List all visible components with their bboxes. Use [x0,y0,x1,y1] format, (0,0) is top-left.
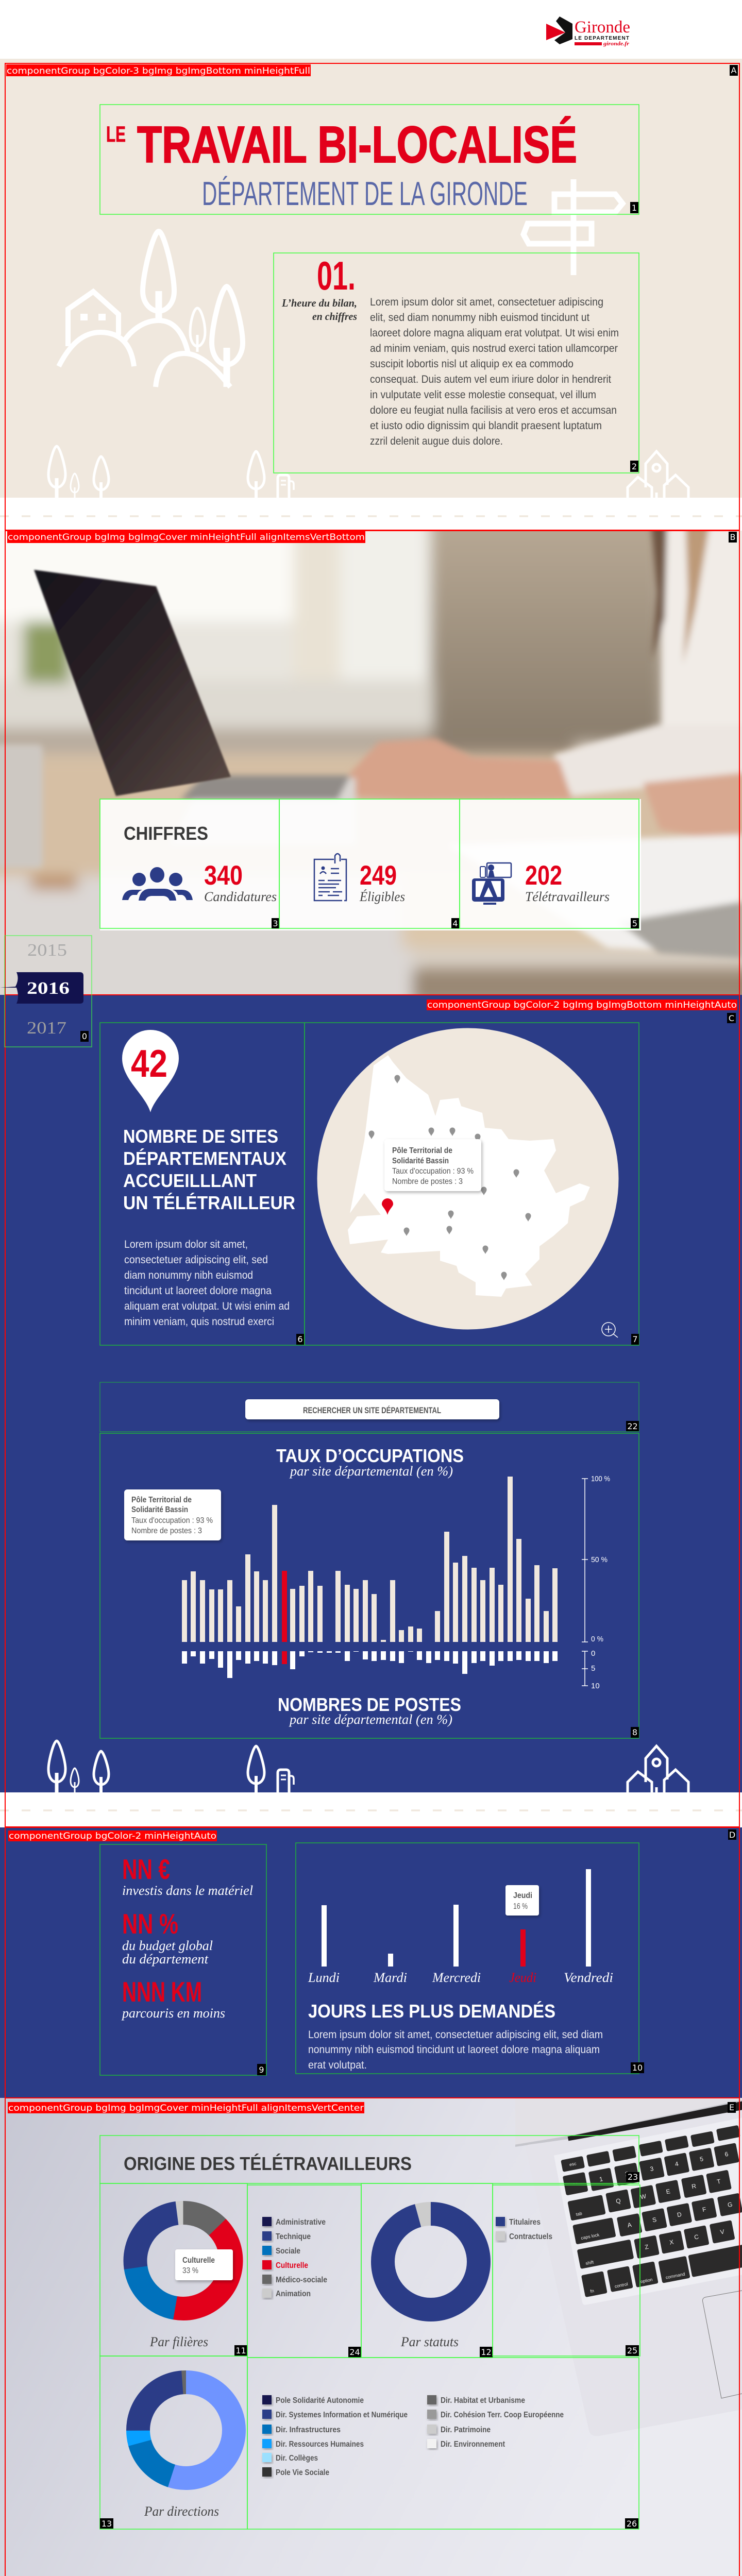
panel: donut filieres: 11 [235,2346,246,2355]
donut chart: filieres [115,2193,251,2329]
legend: directions: Dir. Systemes Information et Numérique [276,2411,408,2419]
panel: occupation chart: 8 [632,1727,637,1737]
panel: occupation chart: par site départemental (en %) [289,1464,453,1479]
legend: filieres: Sociale [276,2247,300,2256]
tooltip [384,1139,481,1191]
panel: CHIFFRES candidatures: Candidatures [204,889,277,904]
photo: laptop from above: C [694,2233,700,2241]
panel: eligibles: 4 [452,919,458,928]
bar chart: days: Lundi [308,1970,340,1985]
icon: people [122,867,193,901]
paragraph: in vulputate velit esse molestie consequat, vel illum [370,389,596,401]
tooltip: Nombre de postes : 3 [131,1527,202,1535]
section tag B: componentGroup bgImg bgImgCover minHeightFull alignItemsVertBottom [8,532,365,543]
panel: donut directions: 13 [102,2519,112,2529]
illustration: village [59,231,243,387]
section tag D: componentGroup bgColor-2 minHeightAuto [9,1831,216,1841]
tooltip: Pôle Territorial de [392,1146,452,1155]
heading: NOMBRE DE SITES [123,1126,278,1147]
panel: donut statuts: 12 [481,2347,492,2357]
legend: directions: Dir. Ressources Humaines [276,2440,364,2449]
paragraph: Lorem ipsum dolor sit amet, consectetuer adipiscing [370,296,603,308]
bar chart: days: Jeudi [509,1970,536,1985]
tooltip [124,1489,221,1540]
tooltip: Solidarité Bassin [131,1505,188,1514]
axis: occupation and posts [582,1475,610,1690]
photo: laptop from above: 6 [724,2150,729,2158]
paragraph: ad minim veniam, quis nostrud exerci tation ullamcorper [370,343,618,354]
photo: laptop from above: S [652,2216,657,2224]
section tag C: componentGroup bgColor-2 bgImg bgImgBottom minHeightAuto [427,1000,737,1010]
photo: laptop from above: ~ [573,2179,578,2188]
icon: map pin with 42 [122,1030,179,1112]
legend: statuts: Titulaires [509,2218,541,2227]
timeline navigation: 2016 [27,979,70,998]
timeline navigation: 0 [82,1031,87,1041]
section tag B: B [730,532,735,542]
photo: laptop from above: tab [576,2211,583,2217]
tooltip: Pôle Territorial de [131,1496,192,1504]
bar chart: posts [182,1651,558,1678]
heading: chiffres: CHIFFRES [124,823,208,844]
logo: Gironde: Gironde [575,18,630,37]
bar chart: days: Vendredi [564,1970,613,1985]
photo: laptop from above: Q [615,2197,621,2205]
intro panel 01 [274,253,639,473]
section B: photo with key figures [0,515,742,1010]
section D: budget and days [0,1827,742,2098]
side heading: L’heure du bilan, [281,297,357,309]
photo: laptop from above: 5 [699,2155,704,2163]
legend: directions: Pole Solidarité Autonomie [276,2396,364,2405]
timeline navigation [0,936,92,1047]
section C: sites map and occupation chart [0,995,742,1827]
legend: directions: Dir. Infrastructures [276,2426,341,2434]
legend: filieres: Animation [276,2290,311,2298]
map circle [317,1028,618,1329]
panel: days: 10 [632,2063,643,2073]
tooltip: Jeudi [505,1885,539,1916]
search button panel: 22 [627,1421,638,1431]
heading: JOURS LES PLUS DEMANDÉS [308,2001,555,2022]
tooltip: Taux d'occupation : 93 % [131,1516,213,1525]
timeline navigation: 2015 [27,941,67,960]
photo: laptop from above: V [719,2228,725,2236]
heading panel: ORIGINE DES TÉLÉTRAVAILLEURS [124,2153,412,2174]
photo: laptop from above: F [702,2206,707,2213]
legend: statuts: Contractuels [509,2232,552,2241]
title panel: 1 [632,203,637,213]
paragraph: zzril delenit augue duis dolore. [370,435,503,447]
photo: laptop from above: G [727,2201,733,2209]
paragraph: consequat. Duis autem vel eum iriure dolor in hendrerit [370,374,611,385]
heading: ACCUEILLLANT [123,1170,257,1191]
panel: days [296,1843,644,2074]
panel: donut statuts [361,2183,493,2358]
intro panel 01: 2 [632,462,637,471]
panel: map: 7 [632,1334,638,1344]
photo: laptop from above: command [665,2272,685,2280]
legend: directions: 26 [627,2519,637,2529]
tooltip: culturelle: 33 % [182,2266,198,2275]
axis: occupation and posts: 5 [591,1664,595,1673]
photo: laptop from above: fn [590,2288,595,2294]
section tag C: C [729,1013,734,1023]
panel: budget figures: 9 [259,2065,264,2075]
logo: Gironde [546,16,630,47]
legend: directions: Dir. Habitat et Urbanisme [441,2396,525,2405]
axis: occupation and posts: 50 % [591,1555,608,1564]
panel: budget figures: du budget global [122,1938,213,1953]
heading: DÉPARTEMENTAUX [123,1148,286,1169]
section tag A: A [731,65,737,75]
paragraph: Lorem ipsum dolor sit amet, consectetuer adipiscing elit, sed diam [308,2029,603,2041]
panel: CHIFFRES candidatures [100,799,279,928]
photo: laptop from above: D [677,2211,682,2218]
title panel: TRAVAIL BI-LOCALISÉ [137,116,577,174]
heading: UN TÉLÉTRAILLEUR [123,1192,295,1213]
figure: 340: 340 [204,860,243,891]
photo: laptop from above: X [669,2238,674,2246]
photo: laptop from above: esc [569,2161,577,2167]
axis: occupation and posts: 0 % [591,1635,603,1643]
subtitle: DÉPARTEMENT DE LA GIRONDE [202,175,528,212]
icon: document [314,854,346,901]
figure: 202: 202 [525,860,562,891]
panel: donut directions: Par directions [144,2504,219,2519]
panel: donut statuts: Par statuts [400,2334,459,2349]
paragraph: elit, sed diam nonummy nibh euismod tincidunt ut [370,312,589,324]
photo: laptop from above: W [639,2193,647,2201]
section tag E: componentGroup bgImg bgImgCover minHeightFull alignItemsVertCenter [8,2103,364,2113]
panel: occupation chart [100,1433,639,1738]
tooltip: Nombre de postes : 3 [392,1177,463,1186]
illustration: skyline [48,446,688,498]
section tag A [6,64,738,76]
paragraph: Lorem ipsum dolor sit amet, [124,1239,248,1250]
axis: occupation and posts: 0 [591,1649,595,1658]
photo: laptop from above: R [691,2182,697,2190]
section tag D: D [729,1830,735,1840]
tooltip: culturelle: Culturelle [182,2256,215,2265]
section tag A: componentGroup bgColor-3 bgImg bgImgBottom minHeightFull [7,66,310,76]
paragraph: nonummy nibh euismod tincidunt ut laoreet dolore magna aliquam [308,2044,600,2056]
logo: Gironde: gironde.fr [603,41,630,47]
icon: map pin with 42: 42 [131,1042,167,1085]
legend: filieres: Culturelle [276,2261,308,2270]
bar chart: days: Mardi [373,1970,407,1985]
legend: directions: Dir. Collèges [276,2454,318,2463]
search button panel: RECHERCHER UN SITE DÉPARTEMENTAL [303,1405,441,1415]
heading panel [100,2136,639,2183]
legend: directions: Pole Vie Sociale [276,2468,329,2477]
panel: donut directions [100,2356,247,2529]
paragraph: laoreet dolore magna aliquam erat volutpat. Ut wisi enim [370,327,619,339]
number 01: 01. [317,253,356,298]
section tag B [7,531,737,543]
selected pin [382,1198,393,1215]
paragraph: suscipit lobortis nisl ut aliquip ex ea commodo [370,358,574,370]
legend: directions: Dir. Patrimoine [441,2426,491,2434]
chart title: TAUX D’OCCUPATIONS [276,1445,464,1466]
title: LE [106,122,126,147]
panel: teletravailleurs [460,799,639,928]
title panel [100,105,639,214]
section tag D [8,1829,736,1841]
panel: eligibles: Éligibles [359,889,405,904]
icon: devices [472,863,511,905]
figure: NNN KM: NNN KM [122,1976,202,2008]
illustration: signpost [524,179,622,275]
panel: occupation chart: par site départemental (en %) [289,1712,452,1727]
section tag E: E [729,2103,734,2112]
paragraph: tincidunt ut laoreet dolore magna [124,1285,272,1297]
page header with logo [0,0,742,59]
photo: woman at laptop [0,515,742,1010]
paragraph [308,2029,603,2071]
tooltip: Taux d'occupation : 93 % [392,1167,474,1176]
paragraph [370,296,619,447]
bar chart: occupation [182,1477,558,1642]
photo: laptop from above: E [665,2188,671,2195]
photo: laptop from above: 1 [599,2175,603,2183]
paragraph: consectetuer adipiscing elit, sed [124,1254,268,1266]
bar chart: days [308,1869,613,1985]
photo: laptop from above: 3 [649,2165,654,2173]
figure: NN euro: NN € [122,1853,170,1885]
paragraph: diam nonummy nibh euismod [124,1269,253,1281]
photo: laptop from above: A [627,2221,632,2229]
photo: laptop from above: 4 [674,2160,679,2168]
legend: directions: Dir. Environnement [441,2440,505,2449]
photo: laptop from above: 2 [625,2170,629,2178]
legend: filieres: Médico-sociale [276,2276,327,2284]
donut chart: directions [126,2370,246,2490]
panel: budget figures: investis dans le matériel [122,1883,253,1898]
legend: filieres: Technique [276,2232,311,2241]
paragraph: dolore eu feugiat nulla facilisis at vero eros et accumsan [370,404,617,416]
paragraph [124,1239,290,1328]
photo: laptop from above: Z [644,2243,649,2251]
photo: laptop from above: T [716,2178,722,2185]
illustration: skyline blue [48,1741,688,1792]
intro panel 01: en chiffres [312,310,357,323]
legend: directions: Dir. Cohésion Terr. Coop Européenne [441,2411,564,2419]
paragraph: erat volutpat. [308,2059,367,2071]
panel: teletravailleurs: Télétravailleurs [525,889,610,904]
tooltip: Solidarité Bassin [392,1157,449,1165]
panel: sites count [100,1023,305,1345]
panel: teletravailleurs: 5 [632,919,637,928]
legend: filieres [247,2185,361,2358]
section A: title and intro [0,59,742,531]
paragraph: et iusto odio dignissim qui blandit praesent luptatum [370,420,602,432]
legend: directions [247,2358,639,2529]
photo: laptop from above: shift [585,2259,595,2266]
photo: laptop from above [0,2098,742,2576]
paragraph: aliquam erat volutpat. Ut wisi enim ad [124,1300,290,1312]
photo: laptop from above: control [614,2281,628,2289]
legend: filieres: 24 [349,2347,360,2357]
heading panel: 23 [628,2172,638,2182]
panel: eligibles [279,799,460,928]
section E: origin donuts [0,2098,742,2576]
timeline navigation: 2017 [27,1019,66,1038]
chart subtitle: NOMBRES DE POSTES [278,1694,461,1715]
figure: NN percent: NN % [122,1908,178,1940]
tooltip: Jeudi: Jeudi [513,1891,532,1900]
axis: occupation and posts: 100 % [591,1475,610,1483]
donut chart: statuts [372,2203,490,2320]
heading [123,1126,295,1213]
panel: budget figures: parcouris en moins [121,2006,225,2021]
panel: CHIFFRES candidatures: 3 [273,919,278,928]
legend: statuts: 25 [627,2346,637,2355]
panel: budget figures [100,1844,266,2075]
panel: donut filieres [100,2183,251,2356]
bar chart: days: Mercredi [432,1970,481,1985]
panel: donut filieres: Par filières [149,2334,208,2349]
section tag C [427,999,737,1023]
map pins [369,1075,531,1280]
panel: map [305,1023,639,1345]
photo: laptop from above: caps lock [581,2232,600,2241]
search button panel [100,1382,639,1432]
icon: zoom [602,1323,618,1337]
logo: Gironde: LE DEPARTEMENT [575,36,629,41]
tooltip: Jeudi: 16 % [513,1902,528,1911]
panel: sites count: 6 [297,1334,303,1344]
panel: budget figures: du département [122,1952,209,1967]
tooltip: culturelle [175,2249,233,2280]
figure: 249: 249 [360,860,397,891]
section tag E [8,2102,736,2113]
legend: statuts [493,2185,640,2356]
axis: occupation and posts: 10 [591,1682,600,1690]
paragraph: minim veniam, quis nostrud exerci [124,1316,274,1328]
legend: filieres: Administrative [276,2218,326,2227]
photo: laptop from above: option [640,2277,653,2284]
